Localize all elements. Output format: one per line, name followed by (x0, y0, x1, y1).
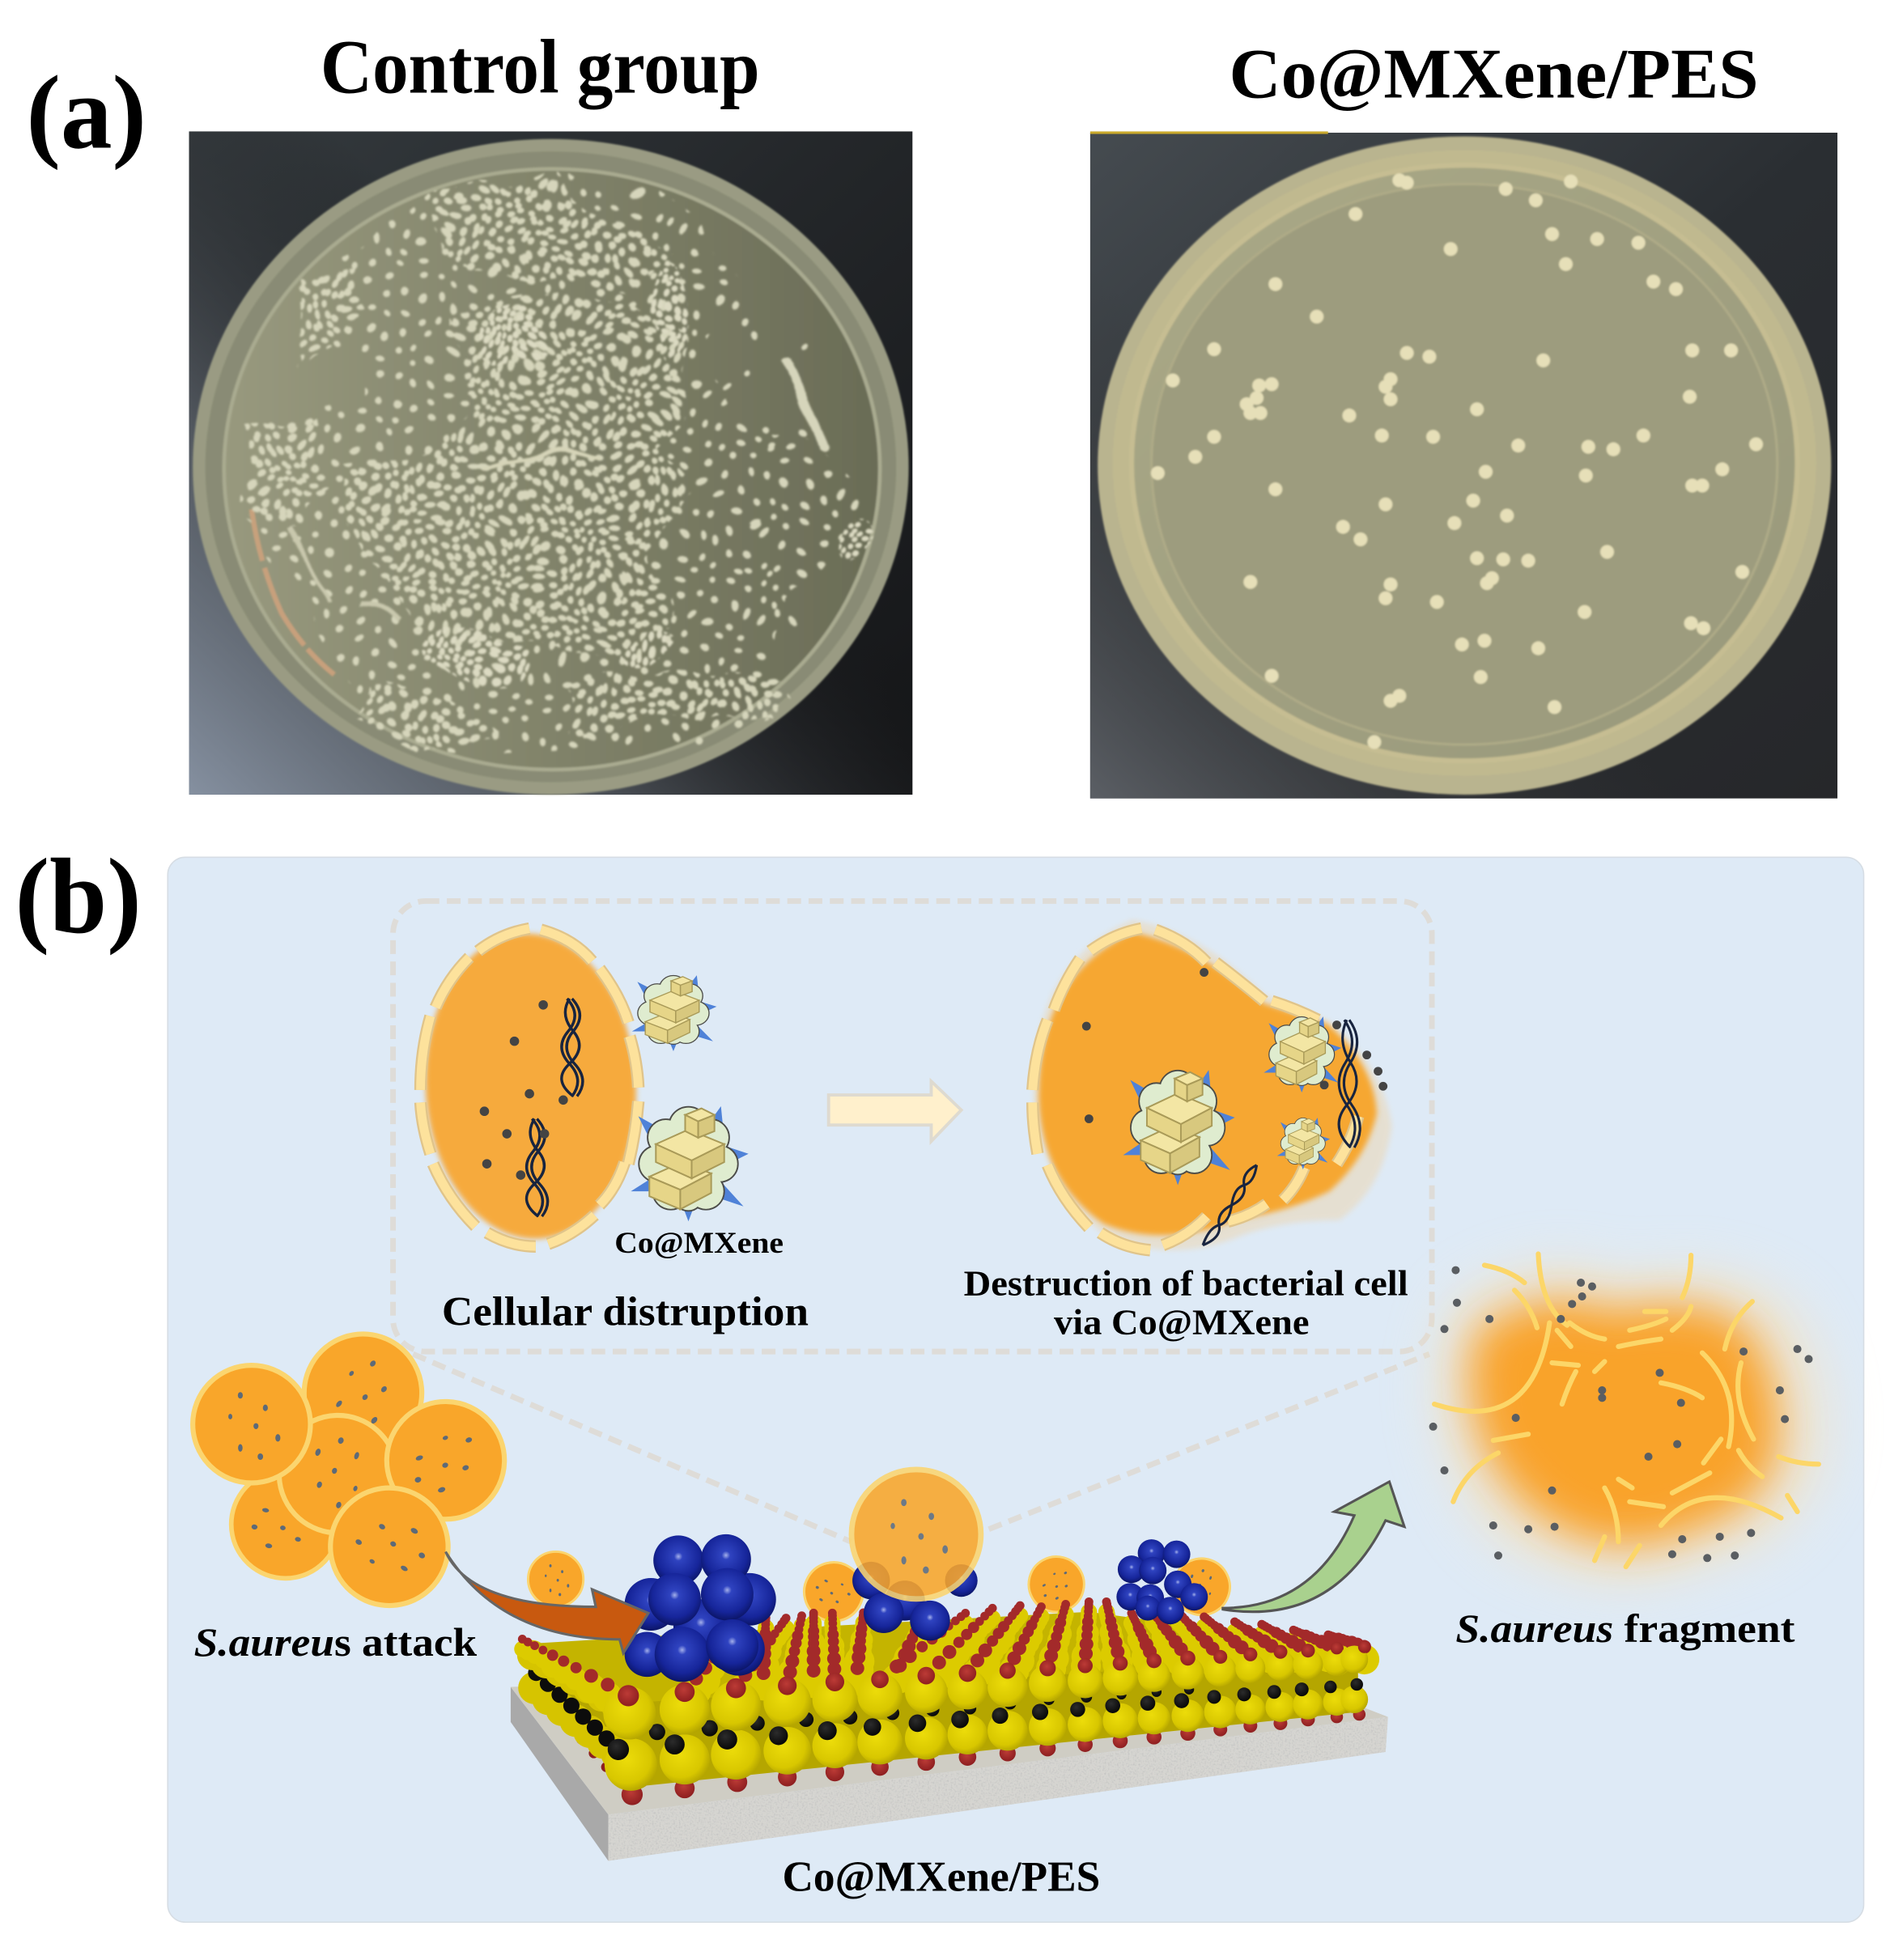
panel label (a): (a) (26, 55, 147, 172)
label: S.aureus attack: S.aureu s attack (194, 1620, 478, 1665)
arrow: to fragment (1223, 1482, 1404, 1612)
panel label (b): (b) (15, 836, 142, 956)
label: S.aureus fragment: S.aureus fragment (1455, 1606, 1795, 1651)
carbon row (608, 1678, 1363, 1760)
label: Cellular distruption: Cellular distruption (442, 1290, 809, 1335)
photo: Co@MXene/PES petri dish (1090, 131, 1837, 799)
top surface oxygen columns (518, 1602, 1365, 1695)
small bacteria on membrane (528, 1546, 1238, 1632)
top surface yellow (518, 1612, 1365, 1703)
icon: Co@MXene medium (1264, 1016, 1341, 1092)
arrow: S.aureus attack (446, 1552, 648, 1653)
DNA strands (1203, 1020, 1360, 1245)
bacterial colonies, treated (1157, 180, 1756, 742)
panel: antibacterial mechanism (168, 857, 1864, 1922)
icon: Co@MXene lower (631, 1106, 749, 1221)
bottom oxygen row (622, 1708, 1365, 1805)
upper titanium row (603, 1646, 1368, 1739)
label: Destruction of bacterial cell: Destruction of bacterial cell (964, 1263, 1408, 1304)
left side columns (518, 1647, 631, 1795)
bacteria cluster (193, 1310, 521, 1627)
cobalt cluster under bacterium (852, 1562, 978, 1640)
top oxygen row (618, 1640, 1370, 1707)
icon: Co@MXene small (1277, 1118, 1330, 1169)
panel background (168, 857, 1864, 1922)
cell: after destruction (1033, 920, 1392, 1250)
label: Co@MXene/PES: Co@MXene/PES (782, 1854, 1100, 1901)
heading: Co@MXene/PES: Co@MXene/PES (1230, 35, 1759, 114)
cobalt cluster left (625, 1534, 776, 1682)
label: Co@MXene: Co@MXene (614, 1227, 784, 1260)
lower titanium row (605, 1686, 1368, 1791)
photo: control group petri dish (189, 131, 912, 795)
substrate slab (511, 1665, 1388, 1860)
bacterial colonies, control (244, 176, 882, 751)
membrane: Co@MXene/PES slab and lattice (511, 1602, 1388, 1860)
heading: Control group: Control group (321, 23, 760, 109)
label: via Co@MXene: via Co@MXene (1054, 1301, 1309, 1342)
bacterium adhered to cobalt (852, 1470, 981, 1599)
cobalt cluster right (1116, 1539, 1208, 1624)
cell: before destruction (418, 928, 749, 1246)
DNA strands (527, 999, 583, 1216)
fragment: S.aureus remains (1433, 1254, 1830, 1585)
second carbon row (649, 1684, 1194, 1740)
icon: Co@MXene large (1123, 1070, 1235, 1185)
arrow: progression (829, 1081, 962, 1141)
dashed zoom box (393, 901, 1432, 1542)
lattice body (525, 1652, 1358, 1787)
icon: Co@MXene upper (632, 975, 716, 1051)
